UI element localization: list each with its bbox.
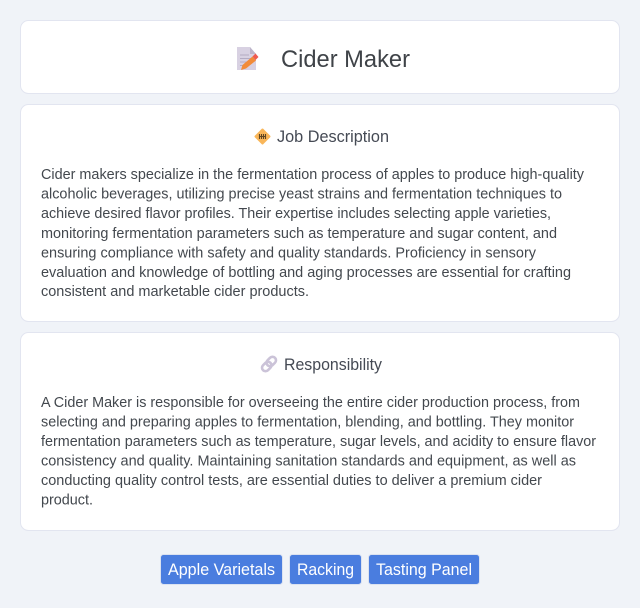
text: responsibility body: product.	[41, 492, 93, 508]
text: responsibility body	[41, 395, 596, 508]
text: job description body: alcoholic beverages, utilizing precise yeast strains and fermentation techniques to	[41, 187, 562, 203]
icon: chain link	[261, 355, 277, 373]
panel: title card	[20, 20, 620, 94]
text: job description body: evaluation and knowledge of bottling and aging processes are essential for crafting	[41, 265, 571, 281]
icon: diamond sign	[256, 130, 270, 144]
panel: job description	[20, 104, 620, 322]
text: responsibility body: consistency and quality. Maintaining sanitation standards and equipment, as well as	[41, 454, 576, 470]
text: responsibility body: fermentation parameters such as temperature, sugar levels, and acidity to ensure flavor	[41, 434, 596, 450]
tag: racking	[290, 554, 362, 584]
text: job description body: achieve desired flavor profiles. Their expertise includes selecting apple varieties,	[41, 206, 551, 222]
text: responsibility body: conducting quality control tests, are essential duties to deliver a premium cider	[41, 473, 542, 489]
tag: tasting panel	[368, 554, 480, 584]
heading: job description: Job Description	[277, 128, 389, 146]
text: responsibility body: selecting and preparing apples to fermentation, blending, and bottling. They monitor	[41, 415, 574, 431]
text: responsibility body: A Cider Maker is responsible for overseeing the entire cider production process, from	[41, 395, 580, 411]
text: job description body: consistent and marketable cider products.	[41, 284, 309, 300]
tag: apple varietals	[160, 554, 282, 584]
heading: responsibility: Responsibility	[284, 356, 383, 374]
title: Cider Maker	[281, 46, 410, 73]
tag: racking: Racking	[297, 561, 354, 579]
text: job description body: ensuring compliance with safety and quality standards. Proficiency in sensory	[41, 245, 537, 261]
text: job description body	[41, 167, 585, 300]
icon: document with pencil	[237, 47, 258, 70]
tag: tasting panel: Tasting Panel	[376, 561, 472, 579]
tag: apple varietals: Apple Varietals	[168, 561, 275, 579]
text: job description body: Cider makers specialize in the fermentation process of apples to produce high-quality	[41, 167, 585, 183]
text: job description body: monitoring fermentation parameters such as temperature and sugar content, and	[41, 226, 557, 242]
panel: responsibility	[20, 332, 620, 530]
